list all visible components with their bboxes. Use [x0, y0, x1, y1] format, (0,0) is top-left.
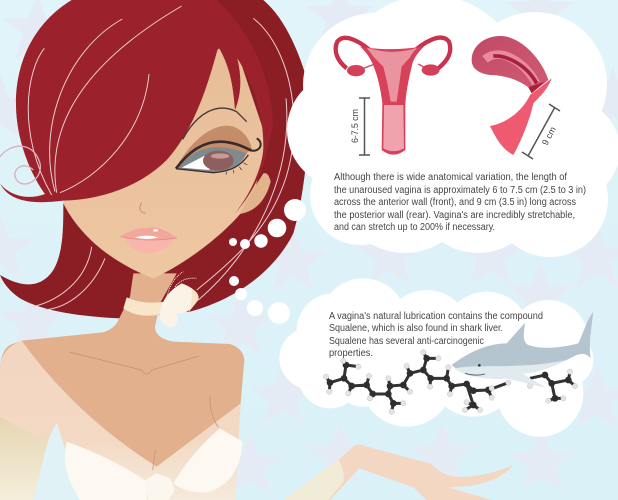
- squalene text: [329, 311, 543, 359]
- anatomy text: Although there is wide anatomical variation, the length of: [334, 172, 567, 183]
- measurement: 6-7.5 cm: 6-7.5 cm: [350, 109, 360, 143]
- measurement: 9 cm: 9 cm: [540, 125, 558, 147]
- flower: [160, 272, 199, 327]
- uterus front view: [336, 38, 450, 155]
- gap under arm: [33, 423, 80, 500]
- measurement: 6-7.5 cm: [350, 98, 370, 155]
- veil overlay: [0, 341, 241, 500]
- sleeve: [283, 460, 344, 500]
- squalene text: A vagina's natural lubrication contains the compound: [329, 311, 543, 322]
- left sleeve: [0, 417, 48, 500]
- squalene text: properties.: [329, 348, 373, 359]
- thought bubbles: [229, 199, 306, 324]
- bottom cloud: [279, 278, 593, 437]
- eyebrow: [183, 108, 247, 139]
- uterus side view: [472, 36, 552, 155]
- squalene text: Squalene has several anti-carcinogenic: [329, 336, 484, 347]
- collarbone: [69, 352, 199, 374]
- choker: [123, 297, 165, 316]
- lips: [120, 228, 177, 253]
- woman body: [0, 273, 244, 500]
- back hair: [0, 0, 312, 318]
- anatomy text: the posterior wall (rear). Vagina's are incredibly stretchable,: [334, 210, 575, 221]
- head: [0, 0, 294, 310]
- hair curl: [0, 146, 40, 184]
- hair highlight lines: [28, 6, 294, 310]
- top cloud: [287, 0, 618, 257]
- dress top: [65, 442, 147, 500]
- hand: [283, 444, 513, 500]
- squalene text: Squalene, which is also found in shark liver.: [329, 323, 503, 334]
- shark: [452, 312, 593, 387]
- dress knot: [145, 473, 175, 500]
- neck and chest: [0, 273, 244, 500]
- nose: [140, 202, 146, 213]
- front hair: [0, 0, 273, 213]
- anatomy text: and can stretch up to 200% if necessary.: [334, 222, 495, 233]
- eye: [176, 126, 261, 175]
- face: [63, 40, 267, 278]
- anatomy text: across the anterior wall (front), and 9 cm (3.5 in) long across: [334, 197, 576, 208]
- anatomy text: the unaroused vagina is approximately 6 to 7.5 cm (2.5 to 3 in): [334, 185, 586, 196]
- squalene molecule: [323, 350, 578, 414]
- ear: [240, 173, 271, 214]
- measurement: 9 cm: [522, 104, 560, 159]
- anatomy text: [334, 172, 586, 233]
